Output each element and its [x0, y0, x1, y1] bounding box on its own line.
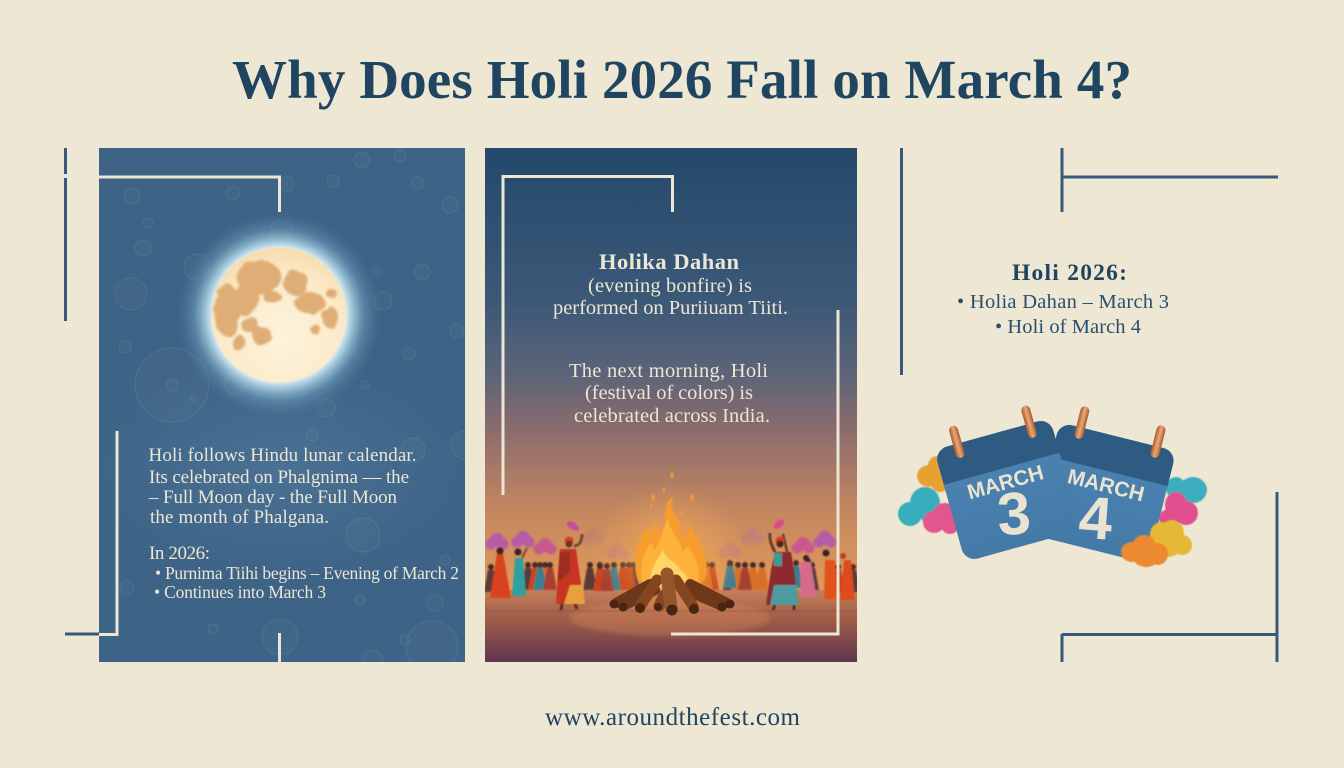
frame: left panel cream brackets: [99, 177, 280, 662]
color powder clouds: [486, 528, 836, 560]
panel: Holika Dahan bonfire: [484, 148, 860, 662]
icon: full moon: [212, 248, 346, 382]
large crowd dancers: [490, 548, 855, 600]
text: Holika Dahan: (evening bonfire) is: [588, 275, 752, 297]
front clouds: [1121, 520, 1192, 567]
text: Holika Dahan: Holika Dahan: [599, 249, 739, 274]
calendar: March 4: 4: [1077, 484, 1115, 553]
text: lunar calendar explanation: [148, 445, 459, 602]
calendar: March 4: MARCH: [1065, 465, 1147, 506]
text: lunar calendar explanation: • Continues into March 3: [154, 582, 326, 602]
text block: Holi 2026 dates: Holi 2026:: [1012, 260, 1127, 286]
text block: Holi 2026 dates: • Holia Dahan – March 3: [957, 291, 1169, 313]
frame: right panel navy lines: [902, 148, 1278, 662]
text block: Holi 2026 dates: • Holi of March 4: [995, 316, 1141, 338]
icon: bonfire logs: [610, 574, 734, 616]
text: next morning Holi: [569, 360, 770, 427]
moon surface craters: [115, 150, 479, 673]
moon glow: [177, 213, 381, 417]
text: Holika Dahan: [553, 249, 788, 319]
text: next morning Holi: (festival of colors) is: [585, 382, 753, 404]
text: lunar calendar explanation: In 2026:: [149, 543, 210, 564]
calendar: March 3: [929, 400, 1082, 565]
icon: calendars with color clouds: [898, 400, 1207, 568]
right clouds: [1159, 477, 1207, 527]
text: lunar calendar explanation: – Full Moon day - the Full Moon: [148, 487, 398, 508]
calendar: March 3: MARCH: [965, 461, 1046, 504]
text: next morning Holi: The next morning, Holi: [569, 360, 768, 382]
text: lunar calendar explanation: Holi follows Hindu lunar calendar.: [148, 445, 416, 466]
calendar: March 4: [1031, 401, 1181, 568]
frame: left panel navy lines: [65, 148, 99, 634]
crowd: [484, 548, 860, 600]
panel: full moon and lunar calendar: [99, 148, 465, 662]
text: lunar calendar explanation: • Purnima Tiihi begins – Evening of March 2: [155, 563, 459, 583]
text: Holika Dahan: performed on Puriiuam Tiiti.: [553, 297, 788, 319]
text: lunar calendar explanation: the month of Phalgana.: [150, 507, 329, 528]
figure: right dancer: [766, 517, 798, 610]
ground: [485, 590, 857, 662]
text: next morning Holi: celebrated across India.: [574, 405, 770, 427]
icon: bonfire flame: [635, 472, 707, 588]
title: Why Does Holi 2026 Fall on March 4?: [232, 49, 1132, 110]
figure: left dancer: [556, 519, 585, 610]
fire glow: [604, 499, 737, 600]
frame: middle panel cream brackets: [503, 176, 838, 634]
footer: website: www.aroundthefest.com: [545, 704, 801, 731]
text: lunar calendar explanation: Its celebrated on Phalgnima — the: [149, 467, 409, 488]
text block: Holi 2026 dates: [957, 260, 1169, 338]
left clouds: [898, 456, 959, 534]
calendar: March 3: 3: [995, 479, 1033, 548]
